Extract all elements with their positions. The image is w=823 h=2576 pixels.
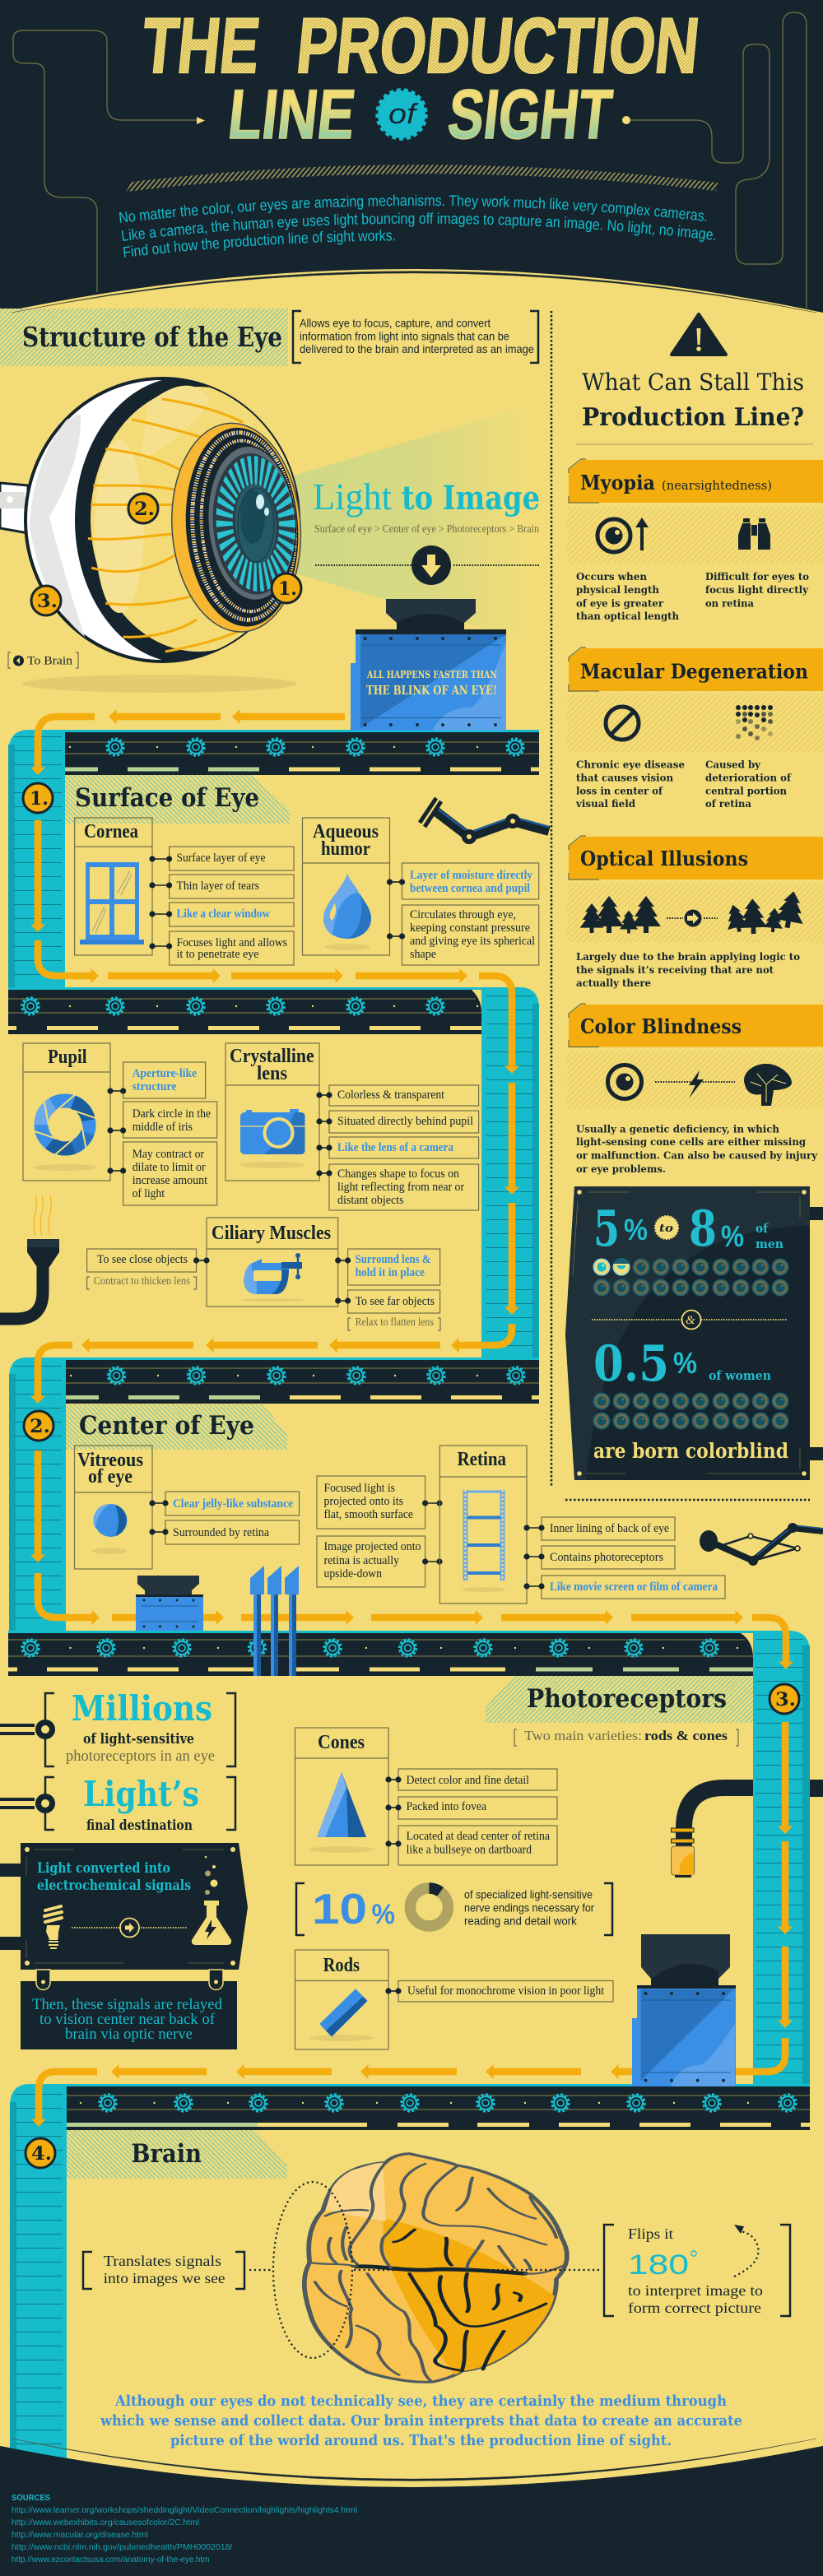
stat: 5 to 8 percent of men: 8 [689, 1200, 717, 1258]
myopia text left: Occurs when [576, 571, 647, 583]
ciliary right facts [338, 1249, 440, 1330]
two varieties caption: rods & cones [644, 1728, 728, 1743]
macular text right [705, 759, 792, 810]
divider with down arrow [315, 545, 539, 585]
badge 2 [128, 494, 158, 523]
cone facts: Detect color and fine detail [407, 1774, 529, 1787]
rods panel [295, 1950, 613, 2049]
bracketed description [293, 311, 538, 363]
stat: 0.5 percent of women: of women [709, 1368, 771, 1383]
title arrow head [197, 117, 205, 124]
decorative circuit lines [13, 12, 807, 309]
translates signals callout [83, 2252, 244, 2289]
icon: tree row [580, 896, 661, 933]
illusions hatch [567, 883, 823, 942]
retina facts [527, 1517, 725, 1599]
to brain label: To Brain [27, 655, 73, 668]
eyeball shadow [22, 675, 297, 693]
panel: relay explanation: Then, these signals are relayed [32, 1996, 222, 2013]
sources: http://www.ncbi.nlm.nih.gov/pubmedhealth/PMH0002018/ [12, 2542, 233, 2552]
conveyor belt 1 [65, 730, 539, 775]
brain illustration [305, 2154, 578, 2383]
icon: window [80, 862, 144, 945]
rotate arrow [734, 2225, 758, 2277]
retina panel [439, 1446, 725, 1604]
illusions text: actually there [576, 977, 651, 989]
icon: flask with bubbles [192, 1856, 231, 1945]
color blindness text: Usually a genetic deficiency, in which [576, 1124, 779, 1135]
rod fact [388, 1981, 613, 2002]
intro text: Find out how the production line of sight works. [123, 230, 395, 258]
stat: 5 to 8 percent of men: men [756, 1237, 783, 1251]
intro text: No matter the color, our eyes are amazing mechanisms. They work much like very complex cameras. [119, 194, 706, 223]
robot arm 1 [420, 798, 549, 844]
ten percent stat: nerve endings necessary for [464, 1901, 594, 1915]
dotted brain callouts [249, 2182, 600, 2358]
closing statement: which we sense and collect data. Our brain interprets that data to create an accurate [100, 2412, 742, 2430]
crystalline lens facts: Changes shape to focus on [337, 1167, 460, 1181]
flips it 180 callout [604, 2225, 790, 2316]
myopia text right: focus light directly [705, 584, 809, 596]
icon: eye to brain signal [607, 1064, 792, 1106]
step badge 4 [26, 2138, 55, 2168]
myopia band: (nearsightedness) [662, 478, 772, 493]
macular text right: of retina [705, 798, 751, 810]
myopia text right: on retina [705, 597, 754, 609]
crystalline lens facts: light reflecting from near or [337, 1181, 464, 1194]
heading: structure of the eye: Structure of the Eye [22, 321, 282, 353]
retina facts: Contains photoreceptors [550, 1551, 663, 1564]
aqueous facts: and giving eye its spherical [410, 935, 535, 948]
vitreous facts: Clear jelly-like substance [173, 1497, 294, 1511]
heated pipe left [0, 1195, 59, 1319]
section 4 roller [10, 2084, 67, 2476]
title line one: PRODUCTION [293, 2, 703, 90]
aqueous humor panel: Aqueous [313, 821, 379, 842]
icon: vitreous ball [92, 1504, 127, 1554]
to brain label [8, 652, 78, 668]
macular text right: Caused by [705, 759, 761, 770]
arrow between trees [667, 910, 718, 926]
step badge 3 [770, 1684, 799, 1714]
heading: to image: to Image [402, 479, 540, 518]
robot arm 2 [700, 1523, 823, 1566]
title line two: SIGHT [444, 76, 616, 154]
macular text left: that causes vision [576, 772, 673, 783]
ciliary right facts: hold it in place [356, 1266, 425, 1279]
heading: photoreceptors: Photoreceptors [527, 1684, 727, 1714]
pupil facts: Aperture-like [133, 1067, 198, 1080]
ciliary right facts: Relax to flatten lens [356, 1316, 434, 1329]
macular text left: visual field [575, 798, 636, 810]
myopia text right [705, 571, 809, 609]
panel: colorblind statistics [565, 1186, 823, 1480]
aqueous facts: Circulates through eye, [410, 908, 516, 921]
light's final destination callout: final destination [86, 1817, 193, 1834]
retina description boxes: retina is actually [324, 1554, 400, 1567]
title end dot [622, 116, 630, 124]
conveyor belt 3 [66, 1358, 539, 1404]
ciliary right facts: To see far objects [356, 1295, 435, 1308]
stat: 5 to 8 percent of men: to [659, 1223, 673, 1235]
cornea facts: it to penetrate eye [176, 948, 258, 961]
icon: aperture [32, 1093, 98, 1171]
sources: http://www.macular.org/disease.html [12, 2530, 148, 2540]
stall heading [582, 369, 804, 432]
cornea facts: Focuses light and allows [176, 936, 287, 949]
color blindness band [569, 1004, 823, 1047]
aqueous humor panel: humor [321, 838, 370, 860]
badge 1 [272, 573, 301, 603]
crystalline lens panel: lens [257, 1063, 287, 1084]
light's final destination callout [0, 1774, 235, 1834]
aqueous facts [390, 863, 539, 965]
vitreous panel: Vitreous [77, 1450, 143, 1471]
badge 1: 1. [278, 578, 297, 600]
pupil facts: structure [133, 1080, 177, 1093]
aqueous humor panel [303, 818, 539, 965]
pupil facts: May contract or [133, 1148, 204, 1161]
horizontal dotted divider [565, 1499, 810, 1501]
light beam [294, 405, 531, 642]
ampersand divider [592, 1310, 787, 1330]
panel: relay explanation [21, 1970, 237, 2049]
flips it 180 callout: Flips it [628, 2226, 673, 2242]
overhead pipe with bottle [672, 1780, 823, 1877]
structure of the eye heading band [0, 309, 288, 366]
flips it 180 callout: to interpret image to [628, 2282, 763, 2299]
bracketed description: information from light into signals that can be [300, 329, 509, 342]
millions callout: photoreceptors in an eye [66, 1748, 215, 1765]
myopia text left: physical length [576, 584, 659, 596]
eyeball illustration [0, 377, 308, 663]
title line two [225, 76, 616, 154]
panel: electrochemical conversion: Light converted into [37, 1860, 170, 1877]
eye grid: men [593, 1258, 788, 1297]
cornea facts [152, 847, 294, 965]
pupil panel: Pupil [48, 1047, 87, 1068]
of badge [377, 90, 426, 139]
pupil facts: of light [133, 1187, 165, 1200]
myopia band: Myopia [580, 471, 655, 494]
badge 2: 2. [134, 499, 155, 520]
illusions text [576, 951, 800, 989]
title [138, 2, 703, 154]
intro text [119, 194, 716, 258]
aqueous facts: keeping constant pressure [410, 921, 530, 935]
closing statement: Although our eyes do not technically see, they are certainly the medium through [114, 2393, 727, 2410]
inner eye cutaway [75, 377, 306, 663]
ciliary muscles panel: Ciliary Muscles [212, 1223, 331, 1244]
crystalline lens facts: Colorless & transparent [337, 1088, 444, 1102]
ciliary muscles panel [87, 1218, 440, 1330]
crystalline lens facts [319, 1085, 479, 1210]
intro text: Like a camera, the human eye uses light bouncing off images to capture an image. No light, no image. [122, 212, 716, 242]
icon: rod [309, 1989, 374, 2041]
panel: relay explanation: brain via optic nerve [65, 2026, 193, 2043]
ten percent stat: of specialized light-sensitive [464, 1887, 593, 1901]
iris rays [221, 468, 291, 579]
closing statement: picture of the world around us. That's the production line of sight. [170, 2432, 672, 2449]
icon: light bulb [44, 1906, 62, 1948]
path steps: Surface of eye > Center of eye > Photoreceptors > Brain [314, 523, 539, 536]
icon: camera [240, 1109, 305, 1168]
vitreous facts: Surrounded by retina [173, 1526, 270, 1539]
panel: electrochemical conversion [0, 1843, 248, 1970]
bracketed description: delivered to the brain and interpreted as an image [300, 342, 534, 355]
retina facts: Inner lining of back of eye [550, 1522, 669, 1535]
ten percent stat [296, 1883, 612, 1935]
blink callout: ALL HAPPENS FASTER THAN [366, 668, 497, 680]
macular text left [575, 759, 685, 810]
retina description boxes: flat, smooth surface [324, 1508, 413, 1521]
macular degeneration band [569, 647, 823, 691]
eye grid: women [593, 1392, 788, 1430]
section 1 roller [8, 730, 65, 989]
vertical dotted divider [551, 311, 552, 1488]
color blindness hatch [567, 1051, 823, 1109]
flow arrows along the line [38, 717, 786, 2119]
color blindness text: or eye problems. [576, 1163, 666, 1175]
vitreous panel [74, 1446, 300, 1569]
crystalline lens panel [226, 1043, 479, 1210]
sources: http://www.ezcontactsusa.com/anatomy-of-the-eye.htm [12, 2555, 210, 2564]
ampersand divider: & [686, 1314, 695, 1327]
pupil panel [23, 1043, 217, 1205]
step badge 4: 4. [31, 2143, 52, 2165]
optic nerve [0, 483, 28, 533]
myopia hatch [567, 507, 823, 564]
step badge 1 [23, 783, 53, 813]
pupil facts: increase amount [133, 1174, 207, 1187]
hatched arc [126, 165, 718, 192]
divider [576, 443, 813, 445]
machine 1: stamp press [351, 599, 506, 731]
cones panel: Cones [318, 1732, 365, 1753]
aqueous facts: between cornea and pupil [410, 882, 530, 895]
step badge 3: 3. [775, 1689, 796, 1710]
stat: 0.5 percent of women: % [673, 1346, 697, 1380]
retina facts: Like movie screen or film of camera [550, 1580, 718, 1594]
ciliary left fact: Contract to thicken lens [94, 1275, 190, 1288]
icon: film strip [462, 1490, 506, 1592]
macular text left: loss in center of [576, 785, 663, 796]
macular text right: central portion [705, 785, 787, 796]
two varieties caption [514, 1728, 738, 1746]
title line two: LINE [225, 76, 359, 154]
of badge: of [388, 99, 419, 130]
cone facts: like a bullseye on dartboard [407, 1843, 532, 1856]
millions callout: Millions [72, 1688, 212, 1729]
section 2 heading band [66, 1404, 287, 1450]
footer dark background [0, 2446, 823, 2576]
section 4 heading band [67, 2130, 287, 2179]
translates signals callout: into images we see [104, 2270, 226, 2286]
retina panel: Retina [458, 1449, 506, 1470]
cones panel [295, 1728, 557, 1865]
step badge 2 [24, 1411, 53, 1441]
retina description boxes [317, 1476, 439, 1587]
stat: 5 to 8 percent of men: % [721, 1219, 744, 1253]
myopia text left: than optical length [576, 610, 679, 622]
pupil [238, 488, 274, 562]
donut chart [410, 1888, 448, 1926]
title line one: THE [138, 2, 263, 90]
ciliary right facts: Surround lens & [356, 1253, 431, 1266]
ciliary left fact [87, 1249, 207, 1289]
flips it 180 callout: 180 [628, 2249, 689, 2281]
cornea facts: Surface layer of eye [176, 852, 265, 865]
icon: eye with up arrow [597, 518, 649, 552]
title line one: PRODUCTION [293, 2, 703, 90]
stat caption: are born colorblind [593, 1439, 788, 1463]
section 1 heading band [65, 775, 290, 824]
optical illusions band [569, 836, 823, 880]
ten percent stat: % [372, 1899, 395, 1930]
macular text right: deterioration of [705, 772, 792, 783]
rods panel: Rods [323, 1955, 360, 1976]
sources: http://www.webexhibits.org/causesofcolor/2C.html [12, 2518, 199, 2527]
heading: center of eye: Center of Eye [79, 1411, 254, 1441]
vitreous panel: of eye [88, 1466, 133, 1488]
retina description boxes: projected onto its [324, 1495, 403, 1508]
cone facts: Packed into fovea [407, 1800, 487, 1813]
icon: deteriorating dots [736, 705, 773, 740]
sources: SOURCES [12, 2493, 50, 2503]
crystalline lens facts: Like the lens of a camera [337, 1141, 454, 1154]
rod fact: Useful for monochrome vision in poor light [407, 1984, 604, 1998]
section 3 roller [753, 1631, 810, 2086]
cornea facts: Thin layer of tears [176, 880, 259, 893]
ten percent stat: 10 [312, 1886, 367, 1933]
aqueous facts: Layer of moisture directly [410, 869, 533, 882]
stat: 0.5 percent of women [593, 1335, 771, 1393]
crystalline lens facts: distant objects [337, 1194, 404, 1207]
two varieties caption: Two main varieties: [524, 1728, 642, 1743]
icon: cone [309, 1772, 374, 1853]
conveyor belt 2 and right roller [8, 987, 539, 1358]
illusions text: the signals it’s receiving that are not [576, 964, 774, 976]
sclera [26, 378, 299, 661]
step badge 2: 2. [30, 1416, 50, 1437]
conveyor belt 5 [67, 2084, 810, 2130]
icon: warning triangle [672, 314, 726, 355]
optical illusions band: Optical Illusions [580, 847, 748, 870]
ten percent stat: reading and detail work [464, 1915, 578, 1928]
machine 1: stamp press: THE BLINK OF AN EYE! [366, 683, 497, 698]
cone facts [388, 1769, 557, 1865]
cone facts: Located at dead center of retina [407, 1830, 551, 1843]
three blue pens [250, 1566, 299, 1676]
macular text left: Chronic eye disease [576, 759, 685, 770]
light's final destination callout: Light’s [83, 1774, 199, 1814]
retina description boxes: Focused light is [324, 1482, 395, 1495]
retina description boxes: Image projected onto [324, 1540, 421, 1553]
badge 3: 3. [37, 591, 58, 612]
illusions text: Largely due to the brain applying logic to [576, 951, 800, 963]
section 1-2 right roller [481, 987, 539, 1358]
cornea facts: Like a clear window [176, 907, 270, 921]
pupil facts: middle of iris [133, 1121, 193, 1134]
macular hatch [567, 694, 823, 752]
icon: distorted tree row [722, 889, 808, 935]
color blindness text [576, 1124, 818, 1175]
myopia text left: of eye is greater [576, 597, 664, 609]
stall heading: What Can Stall This [582, 369, 804, 396]
title line one: THE [138, 2, 263, 90]
stat: 0.5 percent of women: 0.5 [593, 1335, 669, 1393]
icon: binoculars [738, 518, 770, 550]
retina description boxes: upside-down [324, 1567, 383, 1580]
conveyor belt 4 [8, 1631, 753, 1676]
veins [88, 399, 243, 652]
curved swoosh line bottom [12, 2439, 816, 2481]
title line one [138, 2, 703, 90]
panel: electrochemical conversion: electrochemical signals [37, 1877, 191, 1894]
crystalline lens panel: Crystalline [230, 1046, 314, 1067]
step badge 1: 1. [30, 788, 49, 810]
curved swoosh line top [12, 272, 816, 313]
icon: blocked circle [606, 707, 639, 740]
crystalline lens facts: Situated directly behind pupil [337, 1115, 473, 1128]
sources: http://www.learner.org/workshops/sheddinglight/VideoConnection/highlights/highlights4.html [12, 2505, 357, 2515]
color blindness band: Color Blindness [580, 1014, 742, 1038]
stat: 5 to 8 percent of men: of [756, 1221, 769, 1236]
sources [12, 2493, 357, 2564]
macular degeneration band: Macular Degeneration [580, 660, 808, 683]
stat: 5 to 8 percent of men: 5 [593, 1200, 620, 1258]
pupil facts: dilate to limit or [133, 1161, 206, 1174]
photoreceptors heading band [486, 1676, 753, 1723]
flips it 180 callout: form correct picture [628, 2300, 761, 2316]
ciliary left fact: To see close objects [97, 1253, 188, 1266]
millions callout [0, 1688, 235, 1766]
myopia band [569, 459, 823, 503]
closing statement [100, 2393, 742, 2449]
vitreous facts [152, 1492, 300, 1544]
pupil facts: Dark circle in the [133, 1107, 211, 1121]
stall heading: Production Line? [582, 403, 804, 432]
stat: 5 to 8 percent of men: % [624, 1213, 648, 1246]
arrow to flask [72, 1919, 187, 1937]
stat: 5 to 8 percent of men [593, 1200, 783, 1258]
section 2 roller [9, 1358, 66, 1633]
color blindness text: or malfunction. Can also be caused by injury [576, 1150, 818, 1162]
badge 3 [31, 586, 61, 615]
machine 2: small stamp press [136, 1576, 203, 1631]
millions callout: of light-sensitive [83, 1731, 194, 1748]
cornea panel [75, 818, 294, 965]
heading: surface of eye: Surface of Eye [75, 783, 259, 813]
myopia text right: Difficult for eyes to [705, 571, 809, 583]
heading: light: Light [313, 476, 392, 518]
color blindness text: light-sensing cone cells are either missing [576, 1136, 807, 1148]
pupil facts [110, 1062, 217, 1205]
panel: relay explanation: to vision center near back of [40, 2011, 216, 2028]
cornea panel: Cornea [84, 821, 138, 842]
bracketed description: Allows eye to focus, capture, and convert [300, 316, 491, 329]
translates signals callout: Translates signals [104, 2253, 221, 2269]
aqueous facts: shape [410, 948, 436, 961]
iris rings [165, 419, 308, 636]
myopia text left [576, 571, 679, 622]
heading: brain: Brain [131, 2139, 202, 2169]
machine 3: large stamp press [632, 1934, 736, 2086]
icon: water drop [323, 874, 371, 950]
icon: clamp [240, 1253, 305, 1302]
